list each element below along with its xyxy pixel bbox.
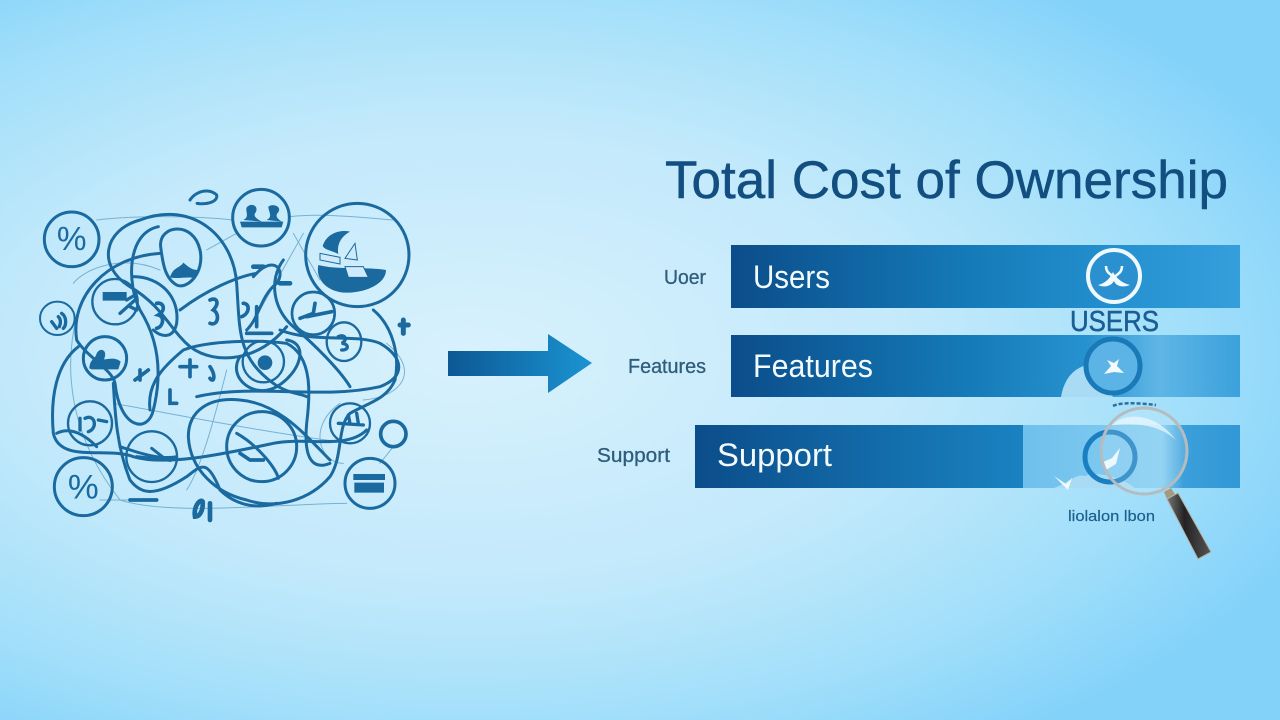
icon: percent circle top: % xyxy=(57,221,86,258)
arrow xyxy=(448,334,592,393)
ring nodes xyxy=(40,189,409,516)
node right middle xyxy=(292,292,335,335)
icon: users badge xyxy=(1088,250,1140,302)
icon: percent circle bottom xyxy=(54,458,112,516)
bar: support xyxy=(695,425,1240,488)
caption: magnifier label: liolalon lbon xyxy=(1068,508,1155,525)
node lower left xyxy=(68,401,112,445)
node with people glyph xyxy=(83,337,127,380)
icon: support badge xyxy=(1054,432,1135,490)
icon: percent circle bottom: % xyxy=(68,469,99,507)
icon: features badge xyxy=(1061,339,1140,397)
side label: user: Uoer xyxy=(664,267,706,289)
icon: box circle bottom right xyxy=(345,458,395,508)
side label: features: Features xyxy=(628,356,706,378)
node bottom center xyxy=(227,412,297,482)
bar: users xyxy=(731,245,1240,308)
small empty ring xyxy=(381,421,406,447)
icon: magnifying glass xyxy=(1101,403,1211,559)
small oval node left xyxy=(40,302,75,335)
bar label: features: Features xyxy=(753,348,873,384)
node right xyxy=(327,322,361,361)
side label: support: Support xyxy=(597,445,670,467)
title: Total Cost of Ownership xyxy=(665,151,1228,210)
icon: large device circle xyxy=(306,203,409,307)
node center xyxy=(243,341,284,382)
node with cluster glyph xyxy=(170,263,197,278)
icon: people circle top xyxy=(233,189,289,246)
scattered small glyphs xyxy=(130,191,408,520)
node bottom left center xyxy=(126,431,177,482)
node with glyph cluster xyxy=(92,279,138,324)
thin background connectors xyxy=(71,215,404,508)
node lower right xyxy=(330,403,370,443)
thick tangled loops xyxy=(53,214,399,506)
bar label: support: Support xyxy=(717,437,832,473)
bar: features xyxy=(731,335,1240,397)
users caption: USERS xyxy=(1070,306,1159,338)
tangled web diagram xyxy=(40,189,409,520)
icon: percent circle top xyxy=(44,212,99,267)
bar label: users: Users xyxy=(753,259,830,295)
